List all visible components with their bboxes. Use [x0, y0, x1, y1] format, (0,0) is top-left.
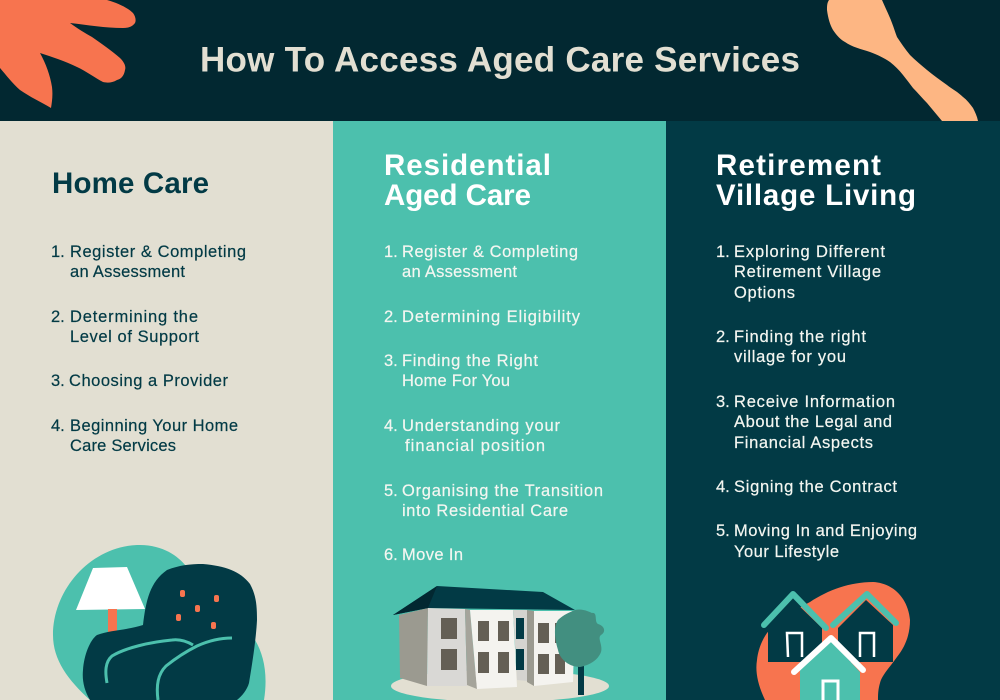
steps: retirement village living: Exploring Different: [734, 243, 885, 261]
steps: retirement village living: Your Lifestyle: [734, 543, 839, 561]
steps: home care: Care Services: [70, 437, 176, 455]
steps: retirement village living: 1.: [716, 243, 730, 261]
steps: residential aged care: into Residential Care: [402, 502, 568, 520]
heading: retirement village living: [716, 149, 916, 212]
steps: retirement village living: Finding the right: [734, 328, 866, 346]
steps: residential aged care: [384, 243, 603, 564]
heading: residential aged care: Aged Care: [384, 179, 531, 212]
steps: residential aged care: Determining Eligibility: [402, 308, 581, 326]
steps: home care: 2.: [51, 308, 65, 326]
title: How To Access Aged Care Services: [200, 40, 800, 80]
header band: [0, 0, 1000, 121]
steps: home care: Choosing a Provider: [69, 372, 228, 390]
steps: residential aged care: 4.: [384, 417, 398, 435]
steps: retirement village living: Receive Information: [734, 393, 895, 411]
steps: retirement village living: Retirement Village: [734, 263, 881, 281]
steps: retirement village living: 4.: [716, 478, 730, 496]
illustration: armchair and lamp: [53, 545, 266, 700]
steps: residential aged care: 5.: [384, 482, 398, 500]
icon: peach spoon: [827, 0, 978, 121]
steps: retirement village living: 5.: [716, 522, 730, 540]
steps: retirement village living: 2.: [716, 328, 730, 346]
steps: retirement village living: village for you: [734, 348, 846, 366]
steps: retirement village living: [716, 243, 917, 561]
steps: residential aged care: Register & Completing: [402, 243, 578, 261]
steps: residential aged care: 2.: [384, 308, 398, 326]
steps: residential aged care: an Assessment: [402, 263, 517, 281]
steps: home care: 3.: [51, 372, 65, 390]
steps: home care: Level of Support: [70, 328, 199, 346]
steps: residential aged care: financial position: [405, 437, 545, 455]
icon: orange brush hand: [0, 0, 136, 108]
steps: home care: [51, 243, 246, 455]
steps: retirement village living: Moving In and Enjoying: [734, 522, 917, 540]
steps: retirement village living: About the Legal and: [734, 413, 892, 431]
steps: home care: 1.: [51, 243, 65, 261]
steps: residential aged care: 6.: [384, 546, 398, 564]
panel: retirement village living: [666, 121, 1000, 700]
steps: residential aged care: Home For You: [402, 372, 510, 390]
heading: retirement village living: Village Living: [716, 179, 916, 212]
steps: residential aged care: Move In: [402, 546, 463, 564]
heading: residential aged care: [384, 149, 551, 212]
steps: retirement village living: 3.: [716, 393, 730, 411]
steps: retirement village living: Options: [734, 284, 795, 302]
steps: residential aged care: 3.: [384, 352, 398, 370]
illustration: residential building with tree: [391, 586, 609, 700]
heading: home care: Home Care: [52, 167, 209, 200]
steps: home care: Determining the: [70, 308, 198, 326]
heading: residential aged care: Residential: [384, 149, 551, 182]
steps: home care: an Assessment: [70, 263, 185, 281]
steps: home care: Beginning Your Home: [70, 417, 238, 435]
steps: home care: Register & Completing: [70, 243, 246, 261]
steps: residential aged care: Organising the Transition: [402, 482, 603, 500]
illustration: village houses: [756, 582, 910, 700]
steps: retirement village living: Signing the Contract: [734, 478, 897, 496]
steps: residential aged care: Finding the Right: [402, 352, 538, 370]
steps: retirement village living: Financial Aspects: [734, 434, 873, 452]
heading: retirement village living: Retirement: [716, 149, 881, 182]
steps: home care: 4.: [51, 417, 65, 435]
panel: home care: [0, 121, 333, 700]
steps: residential aged care: Understanding your: [402, 417, 560, 435]
steps: residential aged care: 1.: [384, 243, 398, 261]
panel: residential aged care: [333, 121, 666, 700]
